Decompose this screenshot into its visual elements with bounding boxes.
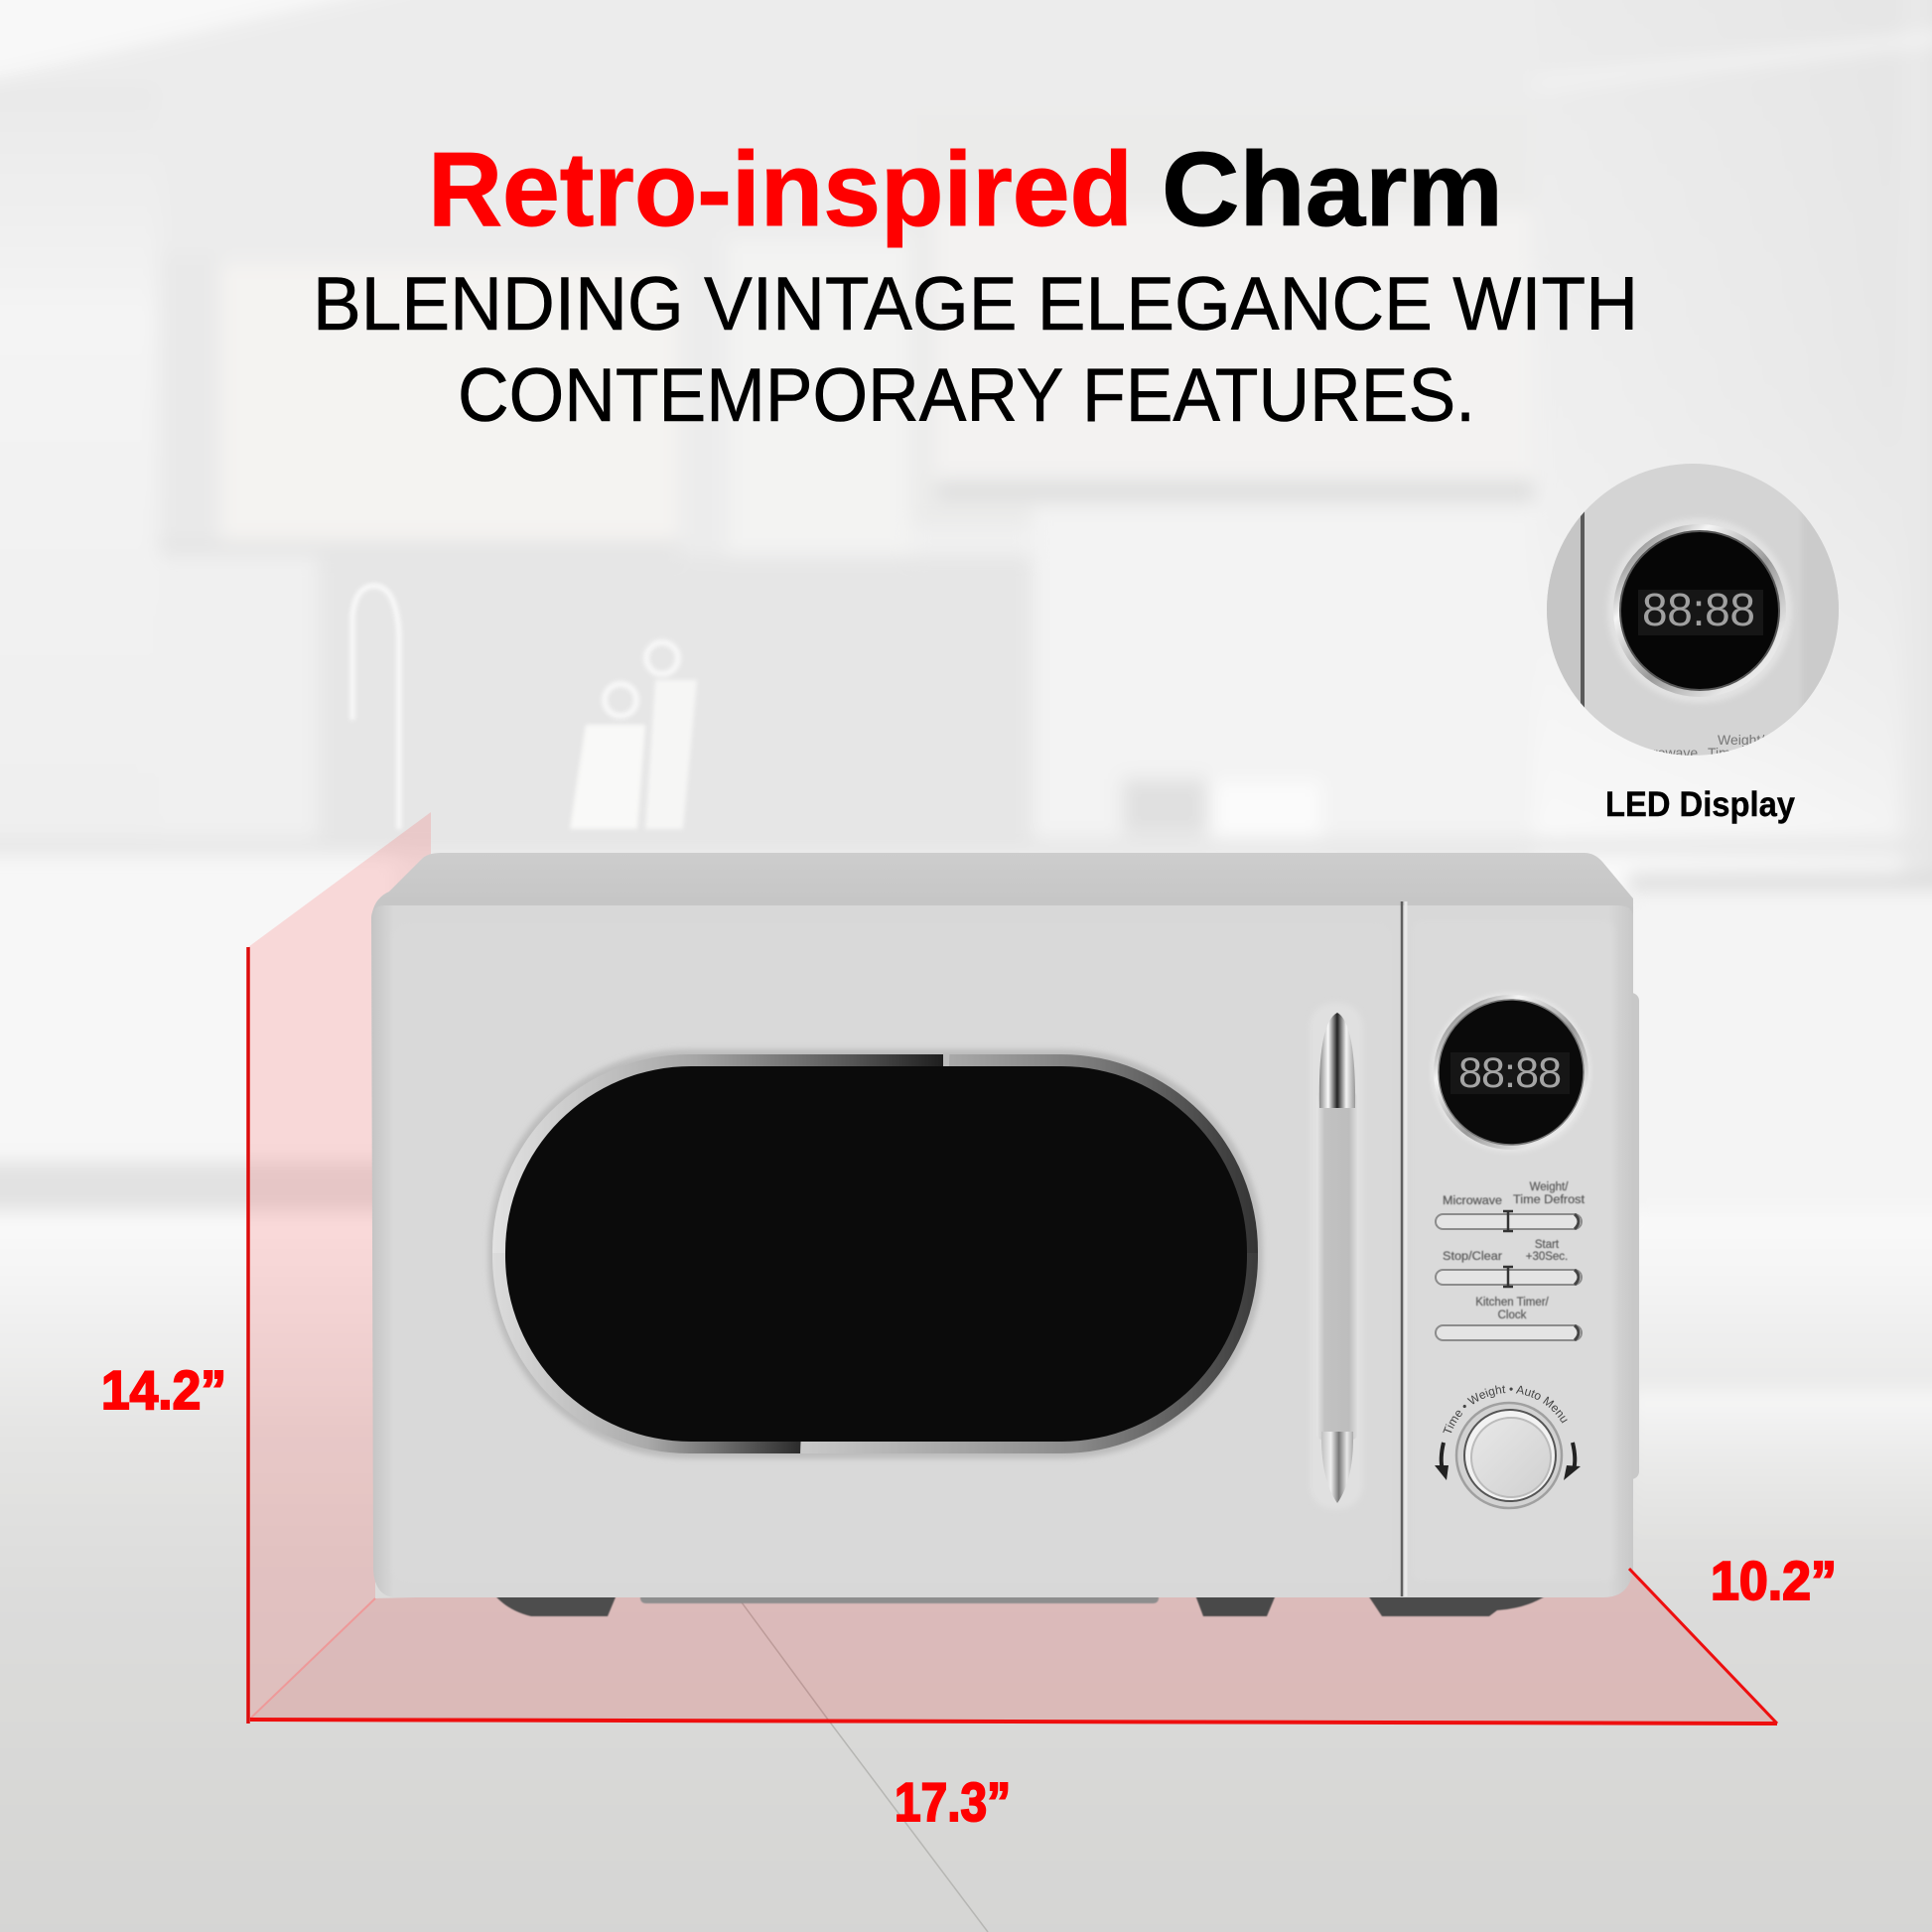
title [428, 131, 1503, 248]
selector knob [1435, 1386, 1581, 1509]
dimension shading: left wall and floor [248, 812, 1777, 1723]
control panel labels: Time Defrost [1513, 1194, 1586, 1206]
LED display [1431, 992, 1591, 1153]
inset: LED display close-up: Weight/ [1718, 732, 1764, 748]
dimension lines [248, 947, 1777, 1724]
microwave [371, 853, 1639, 1617]
control panel labels: Stop/Clear [1443, 1251, 1502, 1263]
control panel labels: Clock [1498, 1310, 1527, 1321]
feet [492, 1592, 1551, 1616]
control panel labels: Weight/ [1530, 1181, 1569, 1193]
control panel labels: Microwave [1443, 1195, 1502, 1207]
subtitle: CONTEMPORARY FEATURES. [458, 353, 1475, 438]
inset caption: LED Display [1605, 785, 1795, 824]
subtitle: BLENDING VINTAGE ELEGANCE WITH [313, 262, 1638, 346]
control panel labels: Kitchen Timer/ [1475, 1297, 1550, 1309]
LED display: 88:88 [1458, 1049, 1562, 1097]
kitchen objects [352, 586, 697, 829]
control panel buttons [1436, 1210, 1582, 1340]
top face [371, 853, 1633, 923]
inset: LED display close-up: 88:88 [1642, 584, 1755, 635]
dimension: depth: 10.2” [1711, 1550, 1837, 1611]
title: Retro-inspired [428, 131, 1133, 248]
control panel labels [1443, 1181, 1586, 1321]
subtitle [313, 262, 1638, 438]
inset: LED display close-up: Time Defrost [1708, 745, 1787, 760]
selector knob: Time • Weight • Auto Menu [1443, 1386, 1568, 1434]
dimension: height: 14.2” [101, 1359, 226, 1421]
front face [371, 905, 1633, 1597]
inset: LED display close-up: rowave [1653, 745, 1698, 760]
door handle [1310, 1003, 1363, 1509]
inset: LED display close-up [1547, 464, 1839, 756]
dimension: width: 17.3” [895, 1771, 1011, 1833]
title: Charm [1162, 131, 1503, 248]
door frame and divider [393, 923, 1392, 1583]
side bump [1618, 993, 1639, 1479]
control panel labels: Start [1535, 1239, 1560, 1251]
control panel labels: +30Sec. [1526, 1251, 1568, 1263]
window [488, 1049, 1263, 1458]
